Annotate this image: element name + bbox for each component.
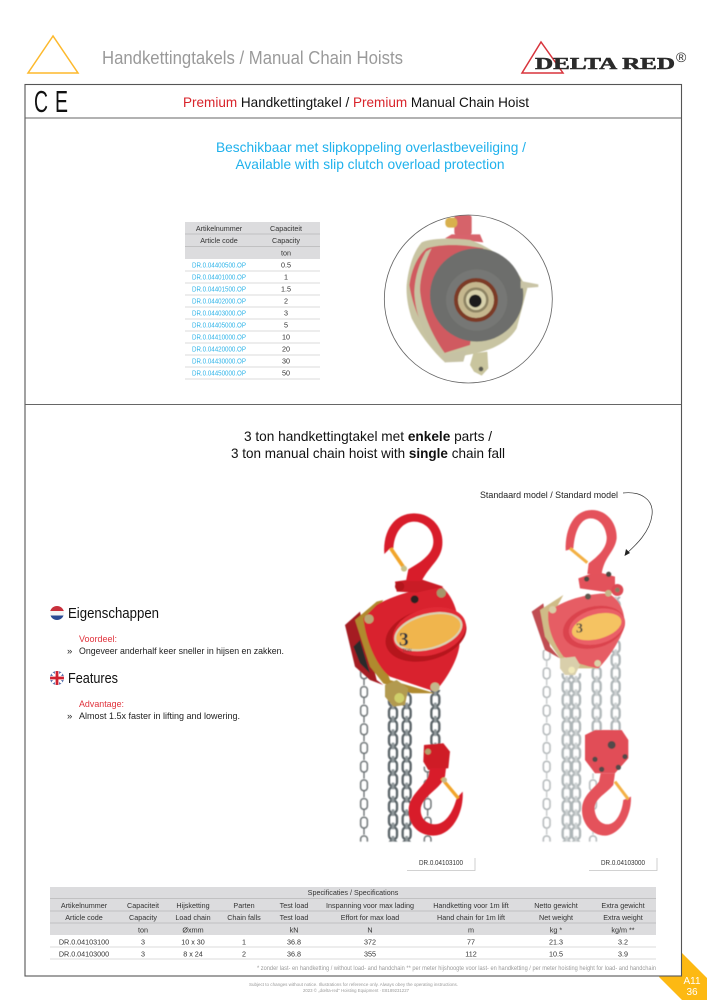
table: specifications: Test load (280, 901, 308, 910)
label: standard model: Standaard model / Standard model (480, 490, 618, 501)
table: specifications: Capacity (129, 913, 157, 922)
table: article codes and capacity: Capaciteit (270, 224, 302, 233)
table: article codes and capacity: DR.0.04403000.OP (192, 308, 246, 318)
image: hoist with single chain fall: 3 (399, 630, 409, 651)
logo: Delta Red: ® (676, 49, 687, 65)
table: specifications: N (367, 926, 373, 934)
divider: header (25, 117, 681, 119)
header: CE mark (34, 84, 68, 119)
table: article codes and capacity: 1.5 (281, 284, 291, 294)
table: specifications: Hand chain for 1m lift (437, 913, 505, 922)
table: specifications: 3.2 (618, 938, 628, 946)
table: specifications: Handketting voor 1m lift (433, 901, 509, 910)
table: article codes and capacity: DR.0.04430000.OP (192, 356, 246, 366)
table: specifications: 10 x 30 (181, 938, 205, 946)
logo: Delta Red: DELTA RED (535, 54, 675, 73)
text: page number: 36 (686, 987, 698, 998)
label: article code hoist 2 (589, 858, 657, 870)
table: article codes and capacity: 5 (284, 320, 288, 330)
logo: Delta Red (522, 42, 687, 73)
table: specifications: 3 (141, 950, 145, 958)
image: hoist standard model (532, 510, 631, 842)
table: specifications: kg/m ** (611, 926, 635, 934)
text: advantage Dutch: Voordeel: (79, 634, 117, 645)
table: specifications: 8 x 24 (183, 950, 203, 958)
text: slip clutch note (216, 139, 526, 172)
table: specifications: Net weight (539, 913, 573, 922)
table: article codes and capacity: 0.5 (281, 260, 291, 270)
table: specifications: 3.9 (618, 950, 628, 958)
table: article codes and capacity: DR.0.04420000.OP (192, 344, 246, 354)
table: specifications: Effort for max load (341, 913, 399, 922)
heading: Eigenschappen: Eigenschappen (68, 605, 159, 622)
table: article codes and capacity: DR.0.04410000.OP (192, 332, 246, 342)
table: specifications: 36.8 (287, 938, 301, 946)
image: hoist with single chain fall (345, 513, 472, 842)
table: specifications: m (468, 926, 474, 934)
label: article code hoist 2: DR.0.04103000 (601, 858, 645, 867)
table: article codes and capacity: DR.0.04402000.OP (192, 296, 246, 306)
table: article codes and capacity: DR.0.04401000.OP (192, 272, 246, 282)
table: specifications: ton (138, 926, 148, 934)
table: specifications: Specificaties / Specifications (308, 888, 399, 897)
table: article codes and capacity: 10 (282, 332, 290, 342)
table: article codes and capacity: DR.0.04450000.OP (192, 368, 246, 378)
text: advantage Dutch: Ongeveer anderhalf keer sneller in hijsen en zakken. (79, 646, 284, 657)
table: specifications: Article code (65, 913, 103, 922)
table: article codes and capacity: 1 (284, 272, 288, 282)
image: hoist with single chain fall: TON (402, 649, 412, 654)
table: specifications: 36.8 (287, 950, 301, 958)
table: specifications: Øxmm (182, 926, 204, 934)
text: table footnote: * zonder last- en handketting / without load- and handchain ** per meter hijshoogte voor last- en handketting / per meter hoisting height for load- and handchain (257, 966, 656, 972)
table: specifications: Test load (280, 913, 308, 922)
table: article codes and capacity: 3 (284, 308, 288, 318)
heading: Features: Features (68, 670, 118, 687)
table: specifications: 21.3 (549, 938, 563, 946)
text: disclaimer footer: Subject to changes without notice. Illustrations for reference only. Always obey the operating instructions. (249, 982, 458, 987)
table: article codes and capacity: Article code (200, 236, 238, 245)
heading: product title: Premium Handkettingtakel / Premium Manual Chain Hoist (183, 94, 529, 110)
text: page number: A11 (683, 976, 701, 987)
text: advantage English: Almost 1.5x faster in lifting and lowering. (79, 711, 240, 722)
table: article codes and capacity: DR.0.04400500.OP (192, 260, 246, 270)
table: specifications: 1 (242, 938, 246, 946)
image: slip clutch detail in circle (384, 215, 552, 383)
table: specifications: 2 (242, 950, 246, 958)
table: article codes and capacity: 30 (282, 356, 290, 366)
heading: single chain fall: 3 ton handkettingtakel met enkele parts / (244, 428, 492, 444)
text: disclaimer footer (249, 982, 458, 993)
table: specifications: Extra gewicht (601, 901, 645, 910)
icon: Dutch flag (50, 606, 64, 620)
image: hoist standard model: 3 (576, 621, 583, 636)
table: specifications: 10.5 (549, 950, 563, 958)
table: article codes and capacity: ton (281, 248, 291, 258)
title: Handkettingtakels / Manual Chain Hoists (102, 48, 403, 68)
text: slip clutch note: Available with slip clutch overload protection (236, 156, 504, 172)
table: specifications: DR.0.04103100 (59, 938, 109, 946)
table: article codes and capacity (185, 222, 320, 379)
table: article codes and capacity: DR.0.04405000.OP (192, 320, 246, 330)
text: advantage English: » (67, 711, 72, 722)
header: CE mark: C (34, 84, 48, 119)
table: specifications: Hijsketting (176, 901, 210, 910)
table: specifications: Capaciteit (127, 901, 159, 910)
table: specifications: DR.0.04103000 (59, 950, 109, 958)
text: advantage Dutch (67, 634, 284, 657)
text: advantage Dutch: » (67, 646, 72, 657)
text: advantage English: Advantage: (79, 699, 124, 710)
table: specifications: 355 (364, 950, 376, 958)
label: article code hoist 1 (407, 858, 475, 870)
text: disclaimer footer: 2023 © „dœlta-red" Hoisting Equipment · E8189231227 (303, 987, 409, 993)
table: specifications: Inspanning voor max lading (326, 901, 414, 910)
table: specifications: 112 (465, 950, 477, 958)
header: CE mark: E (55, 84, 68, 119)
table: article codes and capacity: 20 (282, 344, 290, 354)
icon: corner page tab (659, 953, 707, 1000)
divider: middle section (25, 404, 681, 406)
table: article codes and capacity: Artikelnummer (196, 224, 243, 233)
table: specifications: kN (290, 926, 298, 934)
table: specifications: Artikelnummer (61, 901, 108, 910)
icon: UK flag (50, 671, 64, 685)
label: article code hoist 1: DR.0.04103100 (419, 858, 463, 867)
icon: section triangle (28, 36, 78, 73)
table: specifications: Extra weight (603, 913, 643, 922)
table: article codes and capacity: DR.0.04401500.OP (192, 284, 246, 294)
heading: single chain fall (231, 428, 505, 461)
text: slip clutch note: Beschikbaar met slipkoppeling overlastbeveiliging / (216, 139, 526, 155)
table: article codes and capacity: 50 (282, 368, 290, 378)
table: specifications (50, 887, 656, 959)
table: specifications: 3 (141, 938, 145, 946)
table: specifications: Netto gewicht (534, 901, 578, 910)
table: specifications: 372 (364, 938, 376, 946)
arrow: to standard model hoist (623, 493, 652, 556)
table: article codes and capacity: 2 (284, 296, 288, 306)
table: specifications: Parten (233, 901, 255, 910)
table: article codes and capacity: Capacity (272, 236, 300, 245)
text: page number (683, 976, 701, 998)
text: advantage English (67, 699, 240, 722)
table: specifications: 77 (467, 938, 475, 946)
table: specifications: kg * (550, 926, 562, 934)
table: specifications: Load chain (175, 913, 211, 922)
heading: single chain fall: 3 ton manual chain hoist with single chain fall (231, 445, 505, 461)
table: specifications: Chain falls (227, 913, 261, 922)
